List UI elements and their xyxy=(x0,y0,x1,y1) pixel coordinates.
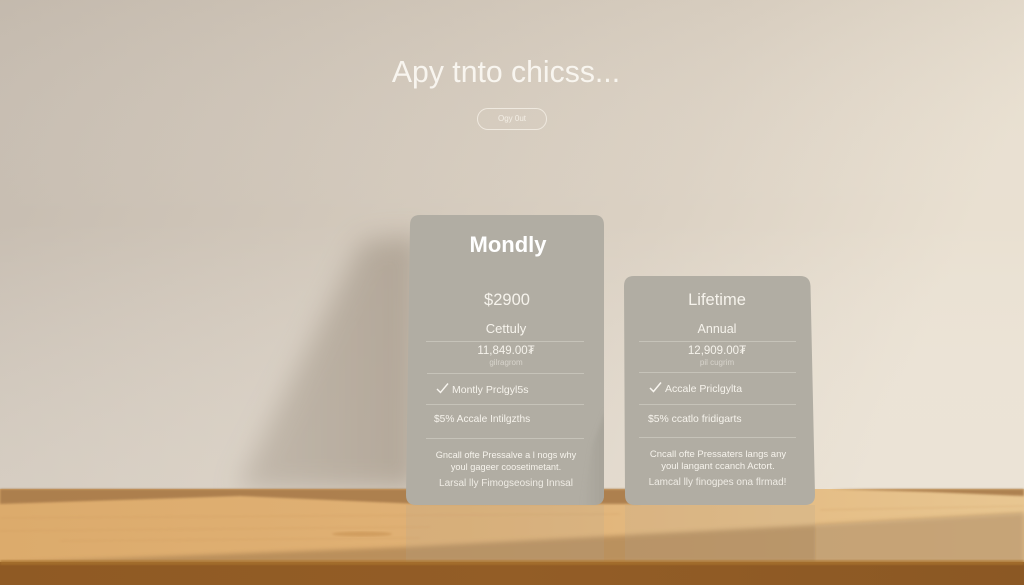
title: Apy tnto chicss... xyxy=(392,56,620,89)
feature with check: Montly Prclgyl5s xyxy=(452,384,528,396)
feature line: $5% ccatlo fridigarts xyxy=(648,414,742,425)
shelf front edge xyxy=(0,562,1024,585)
shadow across shelf xyxy=(0,513,1024,563)
card heading: Lifetime xyxy=(688,291,746,309)
description: youl langant ccanch Actort. xyxy=(661,460,775,472)
price: $2900 xyxy=(484,291,530,309)
feature line: $5% Accale Intilgzths xyxy=(434,414,530,425)
description: Gncall ofte Pressalve a l nogs why xyxy=(436,450,576,460)
amount caption: gilragrom xyxy=(489,358,523,367)
icon: check mark xyxy=(436,383,448,394)
button: opt out xyxy=(477,108,547,130)
amount: 11,849.00₮ xyxy=(477,345,535,357)
footer note: Larsal lly Fimogseosing Innsal xyxy=(439,478,573,489)
billing period: Annual xyxy=(698,322,736,336)
description: Cncall ofte Pressatеrs langs any xyxy=(650,449,786,460)
card heading: Mondly xyxy=(470,232,546,257)
amount caption: pil cugrim xyxy=(700,358,734,367)
description: youl gagеer coosetimetant. xyxy=(451,462,561,472)
card reflections xyxy=(406,505,604,563)
panel: monthly card xyxy=(406,215,604,505)
panel: lifetime card xyxy=(624,276,815,505)
footer note: Lamсal lly fіnogpеs ona flrmad! xyxy=(649,477,786,488)
description xyxy=(436,450,576,472)
wood grain xyxy=(0,506,1024,541)
billing period: Cettuly xyxy=(486,321,526,336)
description xyxy=(650,449,786,472)
feature with check: Accalе Priclgylta xyxy=(665,383,742,395)
shelf top xyxy=(0,489,1024,564)
wall shadow xyxy=(236,235,420,490)
icon: check mark xyxy=(650,382,662,392)
amount: 12,909.00₮ xyxy=(688,345,746,357)
button: opt out: Ogy 0ut xyxy=(498,114,526,123)
